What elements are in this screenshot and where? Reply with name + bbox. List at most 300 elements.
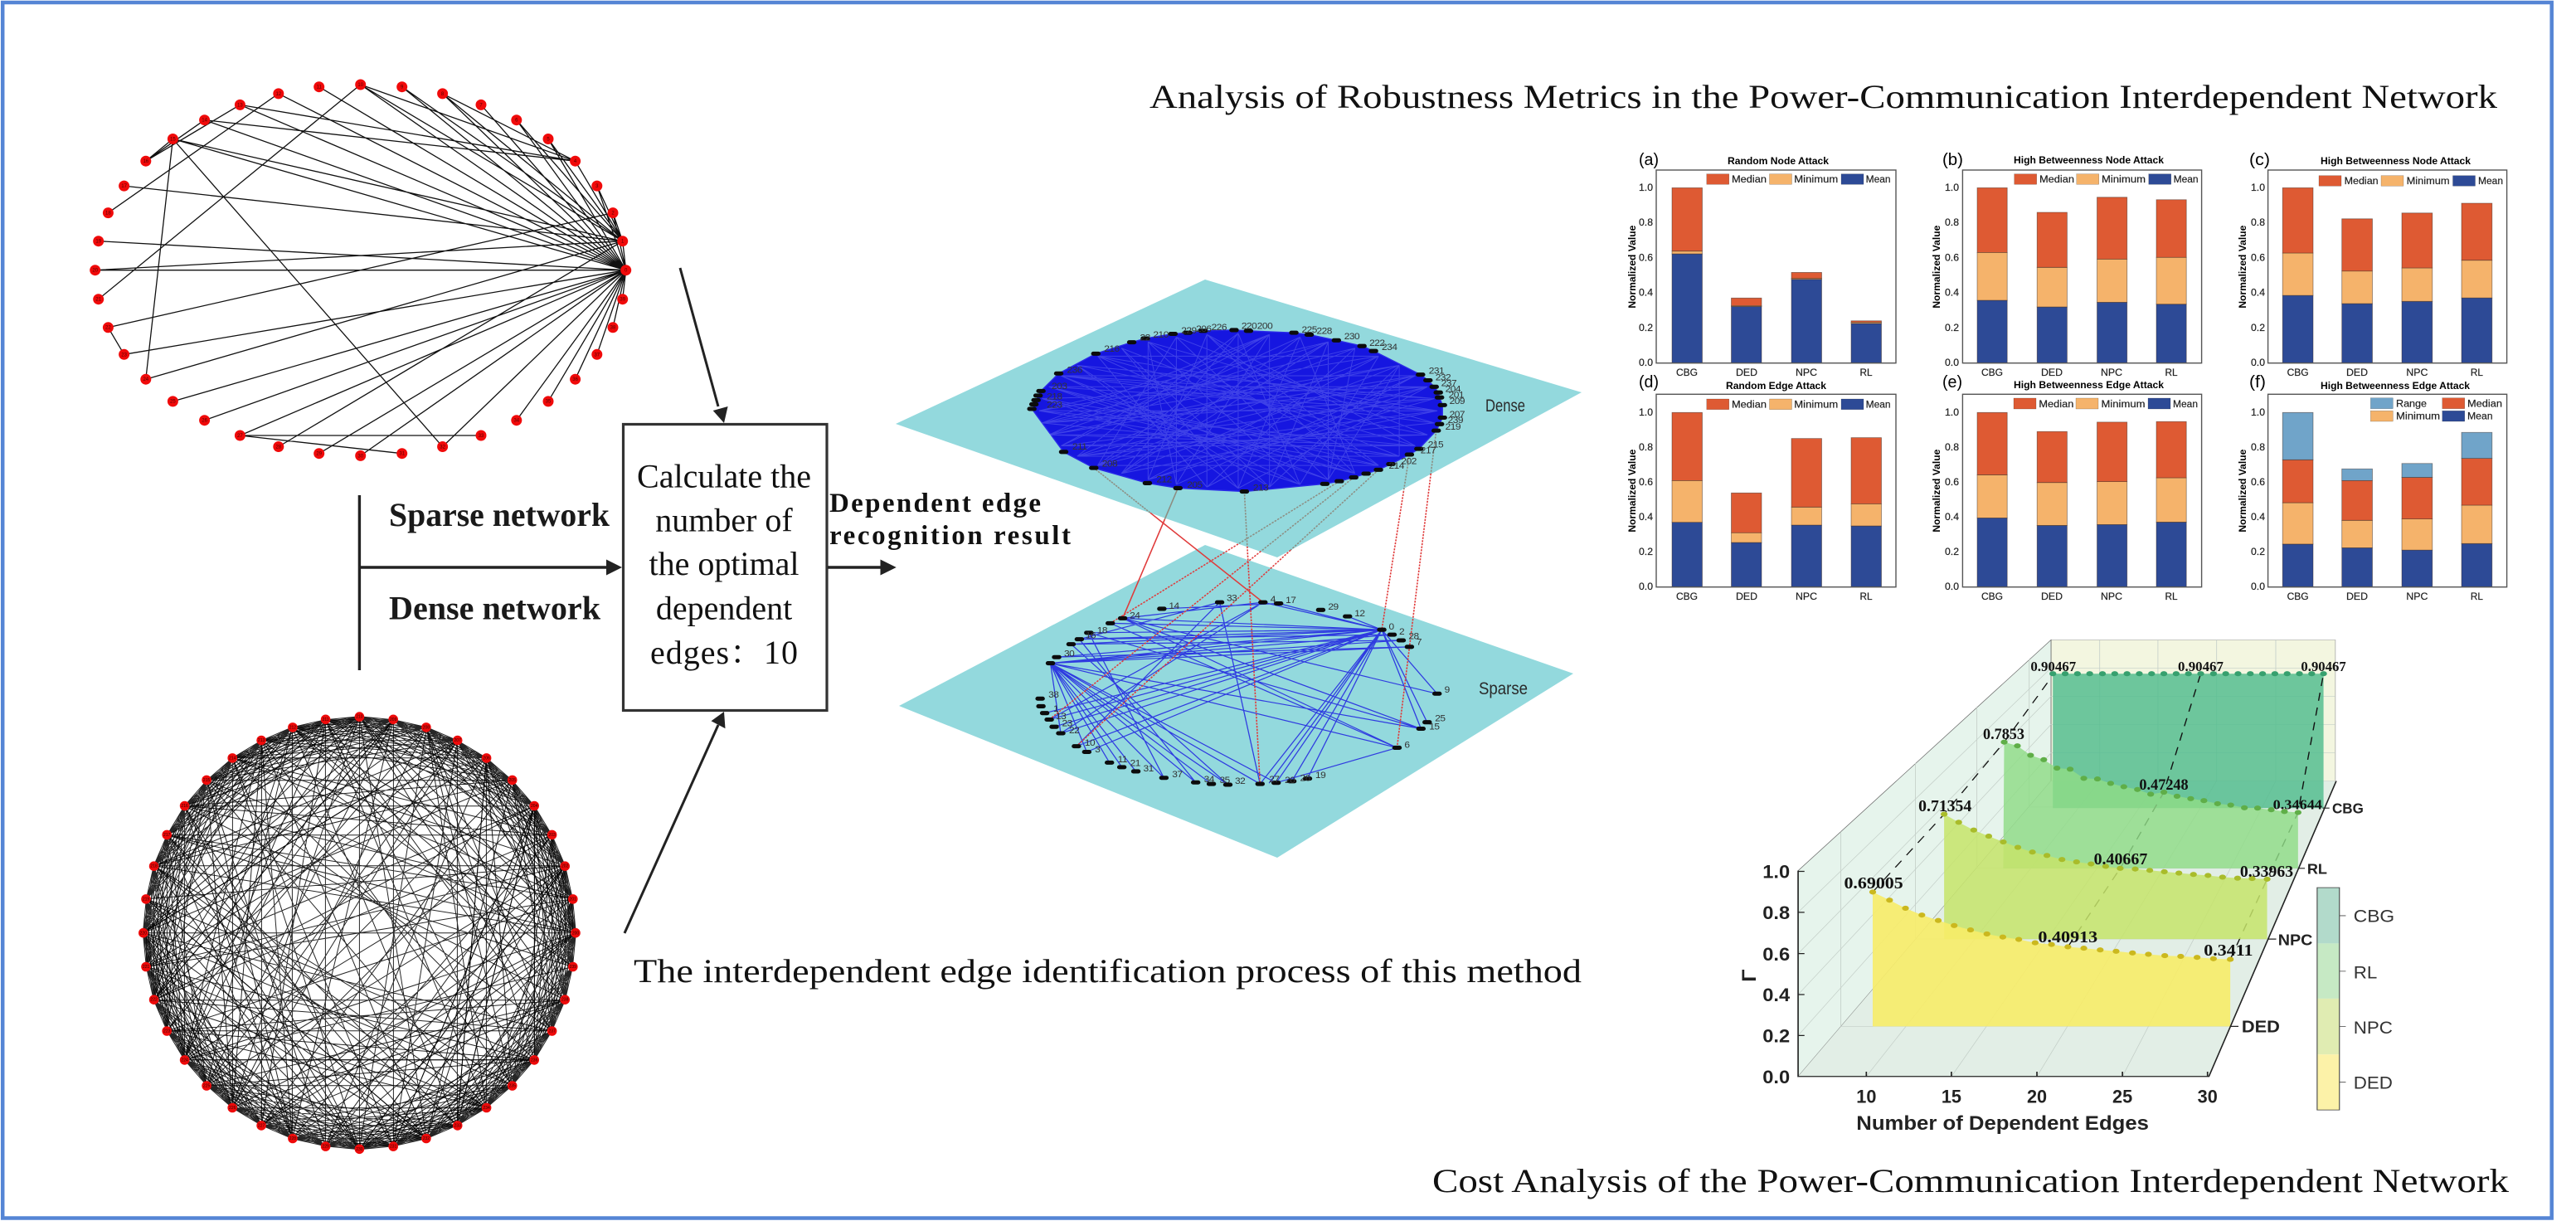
y ticks: 0.8: [2251, 218, 2265, 228]
layer node labels: 225: [1302, 326, 1317, 335]
layer node labels: 212: [1156, 475, 1172, 484]
panel letter: (a): [1639, 151, 1659, 169]
dense node labels: 208: [423, 726, 430, 731]
layer node labels: 232: [1436, 373, 1451, 382]
x labels: CBG: [1981, 592, 2003, 602]
layer node labels: 13: [1056, 712, 1066, 722]
chart title: High Betweenness Node Attack: [2321, 155, 2471, 167]
bars: [2282, 412, 2492, 587]
legend: Mean: [2174, 175, 2199, 185]
x labels: [2287, 592, 2484, 602]
x labels: DED: [1736, 368, 1757, 378]
layer node labels: 2: [1399, 628, 1404, 637]
y ticks: 1.0: [2251, 183, 2265, 193]
dense node labels: 200: [572, 932, 579, 936]
dense node labels: 232: [423, 1136, 430, 1141]
sparse node labels: 6: [515, 119, 518, 124]
category labels: [2242, 801, 2364, 1037]
axes: [1962, 394, 2202, 587]
y ticks: [1945, 408, 1960, 592]
legend: Minimum: [2396, 412, 2440, 422]
value labels: 0.90467: [2178, 659, 2224, 674]
y ticks: [2251, 183, 2266, 368]
y tick labels: 1.0: [1762, 861, 1790, 883]
calculation box: [624, 425, 827, 710]
dependent edges between layers: [1049, 431, 1436, 784]
y ticks: 0.4: [2251, 513, 2266, 523]
legend: [2015, 174, 2199, 185]
x labels: NPC: [2406, 368, 2428, 378]
heading: cost analysis: Cost Analysis of the Power-Communication Interdependent Network: [1432, 1162, 2509, 1199]
legend: Mean: [1866, 175, 1891, 185]
ribbon: DED: [1873, 892, 2230, 1026]
layer node labels: 24: [1130, 611, 1140, 620]
sparse node labels: 28: [275, 445, 282, 450]
layer node labels: 31: [1144, 764, 1154, 774]
y tick labels: 0.2: [1762, 1025, 1790, 1047]
sparse node labels: 14: [202, 119, 208, 124]
sparse node labels: 2: [611, 212, 615, 216]
dense nodes: [139, 712, 581, 1154]
dense node labels: 212: [289, 726, 296, 731]
legend: Mean: [1866, 401, 1891, 411]
sparse node labels: 18: [105, 212, 111, 216]
y ticks: 0.0: [2251, 582, 2265, 592]
y ticks: 0.0: [1945, 582, 1959, 592]
dense node labels: 226: [229, 1106, 236, 1111]
layer node labels: 19: [1315, 771, 1325, 781]
axis label: Normalized Value: [1932, 226, 1942, 309]
dense node labels: 233: [454, 1124, 461, 1129]
layer node labels: 25: [1435, 714, 1446, 723]
calculation box: number of: [655, 502, 793, 539]
layer node labels: 16: [1086, 631, 1096, 641]
colour bar legend: NPC: [2354, 1018, 2393, 1038]
flow: network input lines and arrow: [359, 495, 622, 670]
sparse node labels: 24: [143, 377, 149, 382]
sparse node labels: 13: [237, 103, 243, 108]
y tick labels: 0.8: [1762, 902, 1790, 923]
sparse node labels: 16: [143, 159, 149, 164]
x labels: RL: [2471, 592, 2484, 602]
layer node labels: 17: [1286, 596, 1296, 606]
y ticks: 0.2: [1639, 547, 1653, 557]
panel letter: (c): [2249, 151, 2270, 169]
x tick labels: 25: [2112, 1086, 2132, 1107]
stacked bar chart (e): [1932, 373, 2202, 602]
dense node labels: 221: [143, 965, 149, 970]
layer node labels: 37: [1172, 770, 1183, 780]
arrow: sparse network to box: [680, 268, 728, 423]
y axis title: Γ: [1738, 969, 1761, 982]
layer node labels: 12: [1354, 609, 1365, 619]
x labels: [1676, 592, 1873, 602]
plane: dense: [896, 280, 1582, 557]
layer node labels: 213: [1253, 484, 1268, 494]
sparse node labels: 31: [399, 452, 406, 457]
layer node labels: 219: [1446, 423, 1461, 432]
legend: Minimum: [1794, 401, 1838, 411]
y ticks: 0.4: [1945, 513, 1960, 523]
panel letter: (b): [1942, 151, 1963, 169]
sparse node labels: 34: [513, 419, 520, 424]
chart title: High Betweenness Edge Attack: [2014, 379, 2164, 391]
bars: [1977, 412, 2186, 587]
y ticks: 0.2: [1945, 547, 1959, 557]
sparse node labels: 23: [121, 353, 128, 358]
dense node labels: 216: [181, 804, 188, 809]
y ticks: 0.0: [1945, 358, 1959, 368]
plane labels: Dense: [1485, 396, 1525, 416]
ribbon: CBG: [2053, 674, 2324, 808]
arrow: dense network to box: [625, 712, 725, 933]
plane: sparse: [899, 545, 1573, 858]
sparse node labels: 29: [316, 452, 323, 457]
dense node labels: 217: [163, 833, 171, 838]
category labels: RL: [2307, 862, 2327, 878]
y ticks: 0.0: [2251, 358, 2265, 368]
dense node labels: 203: [548, 833, 556, 838]
axes: [1798, 781, 2336, 1077]
dense node labels: 218: [150, 864, 158, 869]
x tick labels: 10: [1856, 1086, 1876, 1107]
markers: [1873, 674, 2324, 960]
y ticks: 0.8: [2251, 443, 2265, 453]
ribbon: RL: [2003, 742, 2298, 868]
sparse node labels: 19: [95, 240, 102, 245]
layer node labels: 4: [1271, 595, 1276, 605]
sparse node labels: 38: [610, 326, 616, 331]
value labels: 0.69005: [1844, 873, 1903, 893]
value labels: 0.47248: [2139, 776, 2189, 793]
layer node labels: 15: [1429, 722, 1440, 732]
y ticks: [1639, 183, 1654, 368]
layer node labels: 214: [1389, 461, 1405, 471]
layer node labels: 29: [1328, 602, 1339, 612]
dense node labels: 239: [570, 965, 576, 970]
x labels: [1981, 592, 2178, 602]
chart title: Random Edge Attack: [1726, 380, 1826, 392]
sparse node labels: 17: [121, 184, 128, 189]
dense node labels: 211: [323, 718, 329, 722]
heading: robustness metrics: Analysis of Robustness Metrics in the Power-Communication Interdependent Network: [1149, 78, 2497, 115]
x labels: RL: [2471, 368, 2484, 378]
layer node labels: 28: [1408, 632, 1419, 642]
layer node labels: 208: [1102, 460, 1117, 469]
x tick labels: [1856, 1086, 2218, 1107]
layer node labels: 1: [1053, 704, 1058, 714]
dense node labels: 202: [561, 864, 569, 869]
layer node labels: 20: [1285, 776, 1295, 786]
layer node labels: 229: [1181, 326, 1197, 336]
sparse node labels: 7: [479, 103, 483, 108]
legend: [1707, 174, 1891, 185]
y ticks: 0.4: [1945, 289, 1960, 299]
dense node labels: 237: [548, 1029, 556, 1034]
y ticks: 0.2: [1945, 323, 1959, 333]
sparse node labels: 11: [317, 85, 322, 90]
axis label: Normalized Value: [2238, 450, 2248, 533]
stacked bar chart (a): [1628, 151, 1896, 378]
sparse node labels: 21: [95, 298, 102, 303]
x labels: [1981, 368, 2178, 378]
dense node labels: 207: [454, 738, 461, 743]
calculation box: Calculate the: [637, 457, 811, 494]
layer node labels: 207: [1450, 410, 1465, 420]
layer node labels: 26: [1300, 774, 1310, 783]
sparse node labels: 27: [237, 434, 243, 439]
sparse node labels: 30: [357, 454, 364, 459]
dense node labels: 205: [509, 778, 516, 783]
bars: [1977, 187, 2186, 363]
sparse node labels: 3: [595, 184, 599, 189]
3D ribbon chart: cost: [1738, 640, 2394, 1135]
dense node labels: 238: [561, 998, 569, 1003]
y ticks: 0.6: [1639, 254, 1653, 264]
axis label: Normalized Value: [2238, 226, 2248, 309]
dense node labels: 236: [531, 1058, 538, 1063]
layer node labels: 203: [1052, 382, 1067, 392]
y ticks: 0.0: [1639, 582, 1653, 592]
ribbon: NPC: [1944, 815, 2267, 939]
y ticks: 1.0: [1945, 408, 1959, 418]
layer node labels: 10: [1085, 739, 1095, 748]
layer node labels: 217: [1421, 446, 1436, 456]
legend: Mean: [2173, 400, 2198, 410]
stacked bar chart (d): [1628, 373, 1896, 602]
y ticks: [1945, 183, 1960, 368]
y tick labels: [1762, 861, 1790, 1087]
sparse node labels: 5: [547, 138, 550, 143]
axes: [2268, 170, 2507, 363]
layer node labels: 22: [1140, 333, 1150, 343]
axes: [1962, 170, 2202, 363]
layer node labels: 239: [1448, 416, 1463, 426]
legend: Median: [2467, 400, 2502, 410]
sparse network graph: [90, 80, 631, 461]
y ticks: 1.0: [1639, 408, 1653, 418]
bars: [1672, 187, 1881, 363]
axis label: Normalized Value: [1932, 450, 1942, 533]
layer node labels: 38: [1048, 690, 1058, 700]
sparse node labels: [92, 83, 628, 459]
dense node labels: 224: [181, 1058, 188, 1063]
calculation box: the optimal: [649, 545, 800, 582]
label: dependent edge recognition result: recognition result: [829, 521, 1071, 551]
dense node labels: 235: [509, 1084, 516, 1089]
y ticks: 0.2: [1639, 323, 1653, 333]
layer node labels: 209: [1450, 396, 1465, 406]
y ticks: 0.0: [1639, 358, 1653, 368]
legend: Range: [2396, 400, 2427, 410]
x labels: CBG: [2287, 368, 2309, 378]
dense node labels: 223: [163, 1029, 171, 1034]
value labels: 0.33963: [2240, 863, 2293, 881]
x labels: RL: [1859, 592, 1873, 602]
legend: Median: [2039, 175, 2074, 185]
layer node labels: [1047, 322, 1465, 786]
label: sparse network: Sparse network: [389, 496, 610, 533]
colour bar legend: DED: [2354, 1073, 2393, 1092]
x labels: RL: [2165, 592, 2178, 602]
caption: identification process: The interdependent edge identification process of this method: [634, 952, 1582, 990]
layer node labels: 236: [1067, 366, 1082, 375]
dense edges: [143, 717, 576, 1150]
panel letter: (f): [2249, 373, 2266, 392]
sparse node labels: 25: [170, 400, 176, 405]
x labels: DED: [2041, 592, 2063, 602]
y ticks: 0.4: [1639, 513, 1654, 523]
y ticks: 0.8: [1639, 443, 1653, 453]
y ticks: 0.6: [2251, 478, 2265, 488]
colour bar legend: RL: [2354, 963, 2377, 982]
y tick labels: 0.4: [1762, 985, 1790, 1005]
y ticks: 0.8: [1945, 443, 1959, 453]
layer node labels: 32: [1235, 776, 1245, 786]
value labels: 0.34644: [2273, 797, 2322, 813]
layer node labels: 204: [1446, 385, 1461, 395]
panel letter: (e): [1942, 373, 1962, 392]
category labels: NPC: [2278, 932, 2312, 949]
dense node labels: 234: [483, 1106, 490, 1111]
dense node labels: 204: [531, 804, 538, 809]
x labels: RL: [1859, 368, 1873, 378]
sparse node labels: 4: [574, 159, 577, 164]
layer node labels: 215: [1428, 440, 1443, 450]
dense node labels: 231: [390, 1145, 397, 1150]
dense node labels: 206: [483, 756, 490, 761]
layer nodes: [1029, 330, 1445, 785]
sparse node labels: 9: [401, 85, 404, 90]
x labels: [2287, 368, 2484, 378]
value labels: [1844, 659, 2346, 960]
layer node labels: 22: [1069, 726, 1079, 736]
legend: Median: [2345, 177, 2379, 187]
legend: Minimum: [2407, 177, 2450, 187]
axes: [1656, 394, 1896, 587]
dense node labels: 214: [229, 756, 236, 761]
legend: Minimum: [2102, 175, 2146, 185]
layer node labels: 14: [1169, 601, 1180, 611]
x labels: CBG: [1676, 368, 1698, 378]
axes: [2268, 394, 2507, 587]
x labels: NPC: [2101, 368, 2122, 378]
dense node labels: 227: [258, 1124, 265, 1129]
layer node labels: 34: [1204, 775, 1215, 785]
dense node labels: 215: [203, 778, 210, 783]
bars: [2282, 187, 2492, 363]
stacked bar chart (b): [1932, 151, 2202, 378]
layer node labels: 205: [1187, 480, 1203, 490]
layer node labels: 21: [1130, 759, 1140, 768]
sparse node labels: 32: [440, 445, 446, 450]
dense node labels: 222: [150, 998, 158, 1003]
layer node labels: 211: [1072, 442, 1087, 452]
layer node labels: 7: [1417, 638, 1422, 647]
sparse node labels: 20: [92, 269, 99, 274]
layer node labels: 18: [1097, 626, 1107, 636]
legend: Minimum: [1794, 175, 1838, 185]
value labels: 0.71354: [1918, 797, 1972, 815]
layer node labels: 230: [1344, 332, 1359, 342]
dense node labels: 219: [143, 898, 149, 902]
layer node labels: 202: [1401, 457, 1417, 466]
bars: [1672, 412, 1881, 587]
x labels: DED: [2346, 592, 2368, 602]
y ticks: 0.6: [2251, 254, 2265, 264]
calculation box: edges：10: [650, 634, 798, 671]
layer node labels: 216: [1104, 344, 1120, 354]
x labels: NPC: [1796, 368, 1817, 378]
x labels: CBG: [2287, 592, 2309, 602]
dense node labels: 230: [356, 1147, 363, 1152]
dense node labels: 213: [258, 738, 265, 743]
sparse node labels: 8: [441, 92, 445, 97]
layer node labels: 231: [1429, 367, 1444, 377]
sparse layer edges: [1045, 602, 1437, 785]
dense node labels: 209: [390, 718, 397, 722]
y ticks: 0.2: [2251, 323, 2265, 333]
x labels: DED: [1736, 592, 1757, 602]
sparse node labels: 39: [620, 298, 626, 303]
x tick labels: 30: [2198, 1086, 2218, 1107]
value labels: 0.3411: [2204, 941, 2253, 960]
x labels: NPC: [2406, 592, 2428, 602]
legend: Minimum: [2102, 400, 2145, 410]
layer node labels: 9: [1445, 685, 1450, 695]
layer node labels: 218: [1047, 392, 1062, 401]
sparse node labels: 0: [625, 269, 628, 274]
stacked bar chart (c): [2238, 151, 2507, 378]
sparse node labels: 37: [594, 353, 600, 358]
dense node labels: 229: [322, 1145, 329, 1150]
panel letter: (d): [1639, 373, 1659, 392]
chart title: Random Node Attack: [1728, 155, 1829, 167]
sparse node labels: 22: [105, 326, 111, 331]
legend: Mean: [2478, 177, 2503, 187]
label: dependent edge recognition result: [829, 489, 1071, 551]
layer node labels: 3: [1095, 745, 1101, 755]
y ticks: 1.0: [1945, 183, 1959, 193]
plane labels: Sparse: [1479, 679, 1528, 698]
value labels: 0.7853: [1983, 725, 2024, 742]
layer node labels: 210: [1153, 330, 1169, 340]
y ticks: 0.6: [1945, 478, 1959, 488]
chart title: High Betweenness Edge Attack: [2321, 380, 2470, 392]
sparse node labels: 26: [202, 419, 208, 424]
legend: Median: [1732, 175, 1767, 185]
y tick labels: 0.6: [1762, 944, 1790, 965]
legend: [2014, 398, 2198, 410]
layer node labels: 6: [1404, 741, 1410, 750]
value labels: 0.40667: [2094, 850, 2148, 868]
sparse node labels: 10: [357, 83, 364, 88]
sparse nodes: [90, 80, 631, 461]
sparse node labels: 36: [572, 377, 579, 382]
y ticks: 0.4: [1639, 289, 1654, 299]
y ticks: 0.6: [1639, 478, 1653, 488]
legend: [2370, 398, 2502, 422]
dense node labels: 228: [289, 1136, 296, 1141]
calculation box: dependent: [656, 590, 792, 627]
layer node labels: 35: [1220, 776, 1230, 786]
value labels: 0.90467: [2030, 659, 2076, 674]
y ticks: [2251, 408, 2266, 592]
two-layer interdependent network: [896, 280, 1582, 858]
x labels: NPC: [2101, 592, 2122, 602]
x labels: NPC: [1796, 592, 1817, 602]
axes: [1656, 170, 1896, 363]
